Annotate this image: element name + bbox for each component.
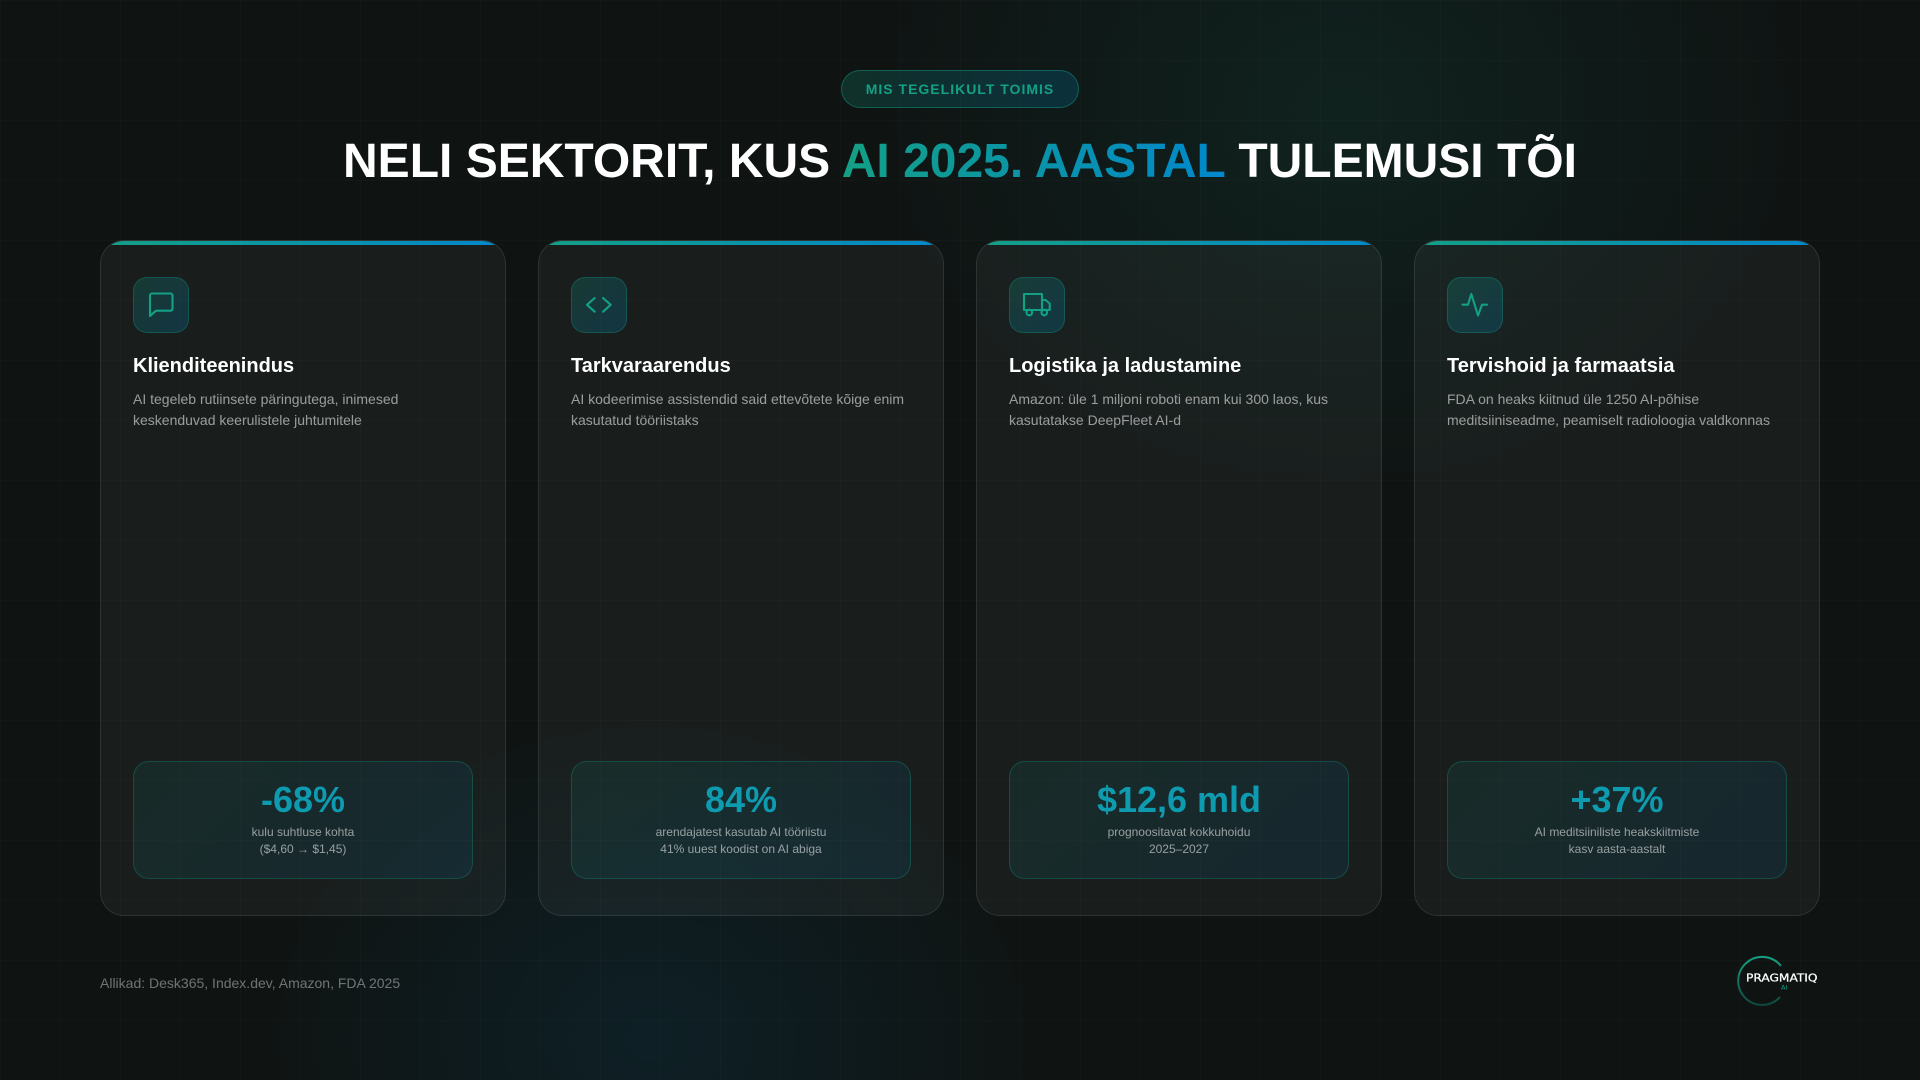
- source note: Allikad: Desk365, Index.dev, Amazon, FDA 2025: [100, 975, 400, 991]
- stat box: 2025–2027: [1149, 842, 1209, 856]
- heading: Logistika ja ladustamine: [1009, 355, 1241, 377]
- stat box: [1447, 761, 1787, 879]
- stat box: -68%: [261, 779, 345, 820]
- eyebrow badge: MIS TEGELIKULT TOIMIS: [866, 81, 1054, 97]
- stat box: [133, 761, 473, 879]
- panel: Tervishoid ja farmaatsia: [1414, 240, 1820, 916]
- stat box: kulu suhtluse kohta: [252, 825, 354, 839]
- stat box: arendajatest kasutab AI tööriistu: [656, 825, 826, 839]
- logo: AI: [1781, 984, 1787, 992]
- stat box: [571, 761, 911, 879]
- title: NELI SEKTORIT, KUS AI 2025. AASTAL TULEMUSI TÕI: [343, 135, 1577, 188]
- description: AI kodeerimise assistendid said ettevõtete kõige enim kasutatud tööriistaks: [571, 391, 904, 428]
- panel: Tarkvaraarendus: [538, 240, 944, 916]
- description: FDA on heaks kiitnud üle 1250 AI-põhise meditsiiniseadme, peamiselt radioloogia valdkonnas: [1447, 391, 1770, 428]
- panel: Klienditeenindus: [100, 240, 506, 916]
- stat box: 41% uuest koodist on AI abiga: [660, 842, 822, 856]
- icon: chat bubble: [133, 277, 189, 333]
- logo: [1737, 956, 1818, 1006]
- heading: Klienditeenindus: [133, 355, 294, 377]
- heading: Tervishoid ja farmaatsia: [1447, 355, 1674, 377]
- description: AI tegeleb rutiinsete päringutega, inimesed keskenduvad keerulistele juhtumitele: [133, 391, 398, 428]
- icon: truck: [1009, 277, 1065, 333]
- heading: Tarkvaraarendus: [571, 355, 731, 377]
- panel: Logistika ja ladustamine: [976, 240, 1382, 916]
- stat box: $12,6 mld: [1097, 779, 1261, 820]
- stat box: +37%: [1570, 779, 1664, 820]
- logo: PRAGMATIQ: [1746, 972, 1818, 985]
- stat box: prognoositavat kokkuhoidu: [1108, 825, 1250, 839]
- stat box: 84%: [705, 779, 777, 820]
- stat box: ($4,60 → $1,45): [260, 842, 346, 856]
- stat box: kasv aasta-aastalt: [1569, 842, 1665, 856]
- icon: activity pulse: [1447, 277, 1503, 333]
- stat box: [1009, 761, 1349, 879]
- icon: code brackets: [571, 277, 627, 333]
- stat box: AI meditsiiniliste heakskiitmiste: [1535, 825, 1699, 839]
- eyebrow badge: [841, 70, 1079, 108]
- description: Amazon: üle 1 miljoni roboti enam kui 300 laos, kus kasutatakse DeepFleet AI-d: [1009, 391, 1328, 428]
